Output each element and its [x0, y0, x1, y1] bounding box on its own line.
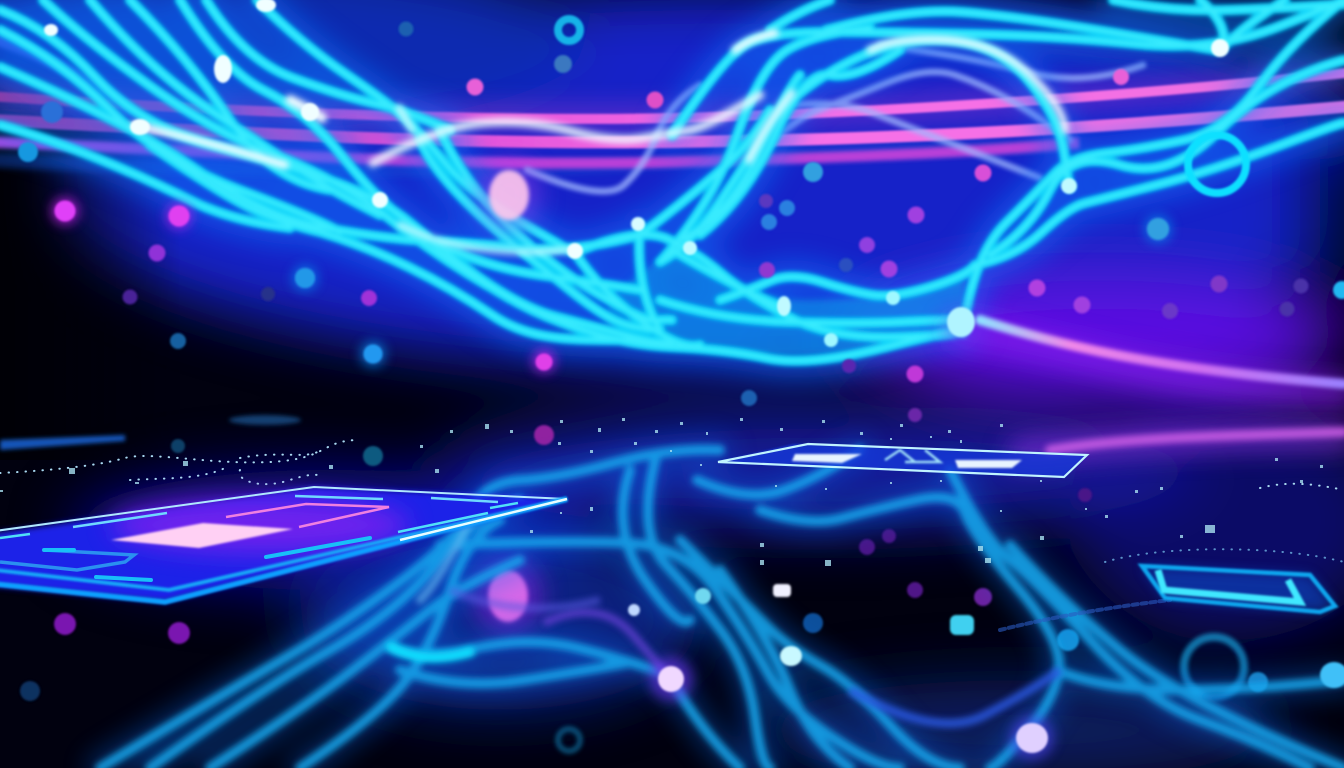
floating strands wave: [0, 0, 1344, 361]
distant blurred platforms: [0, 415, 301, 450]
white highlights on strands: [135, 33, 1065, 252]
icon: ring upper right: [1188, 135, 1246, 193]
icon: ring lower center: [558, 729, 580, 751]
far lavender strands: [0, 40, 1143, 191]
circuit panel left: [0, 487, 567, 602]
circuit panel center: [718, 444, 1087, 477]
glowing pink chip: [111, 523, 293, 548]
pink horizontal light bands: [0, 72, 1344, 171]
icon: ring lower right: [1184, 637, 1244, 697]
bright floor nodes: [628, 584, 1344, 760]
pink-purple reflection stream: [1020, 432, 1344, 452]
floor lights scatter: [0, 418, 1323, 566]
large rings: [558, 19, 1246, 751]
dotted floor circuits: [0, 440, 1344, 630]
panel outline: [0, 487, 567, 531]
reflected strands on the floor: [100, 450, 1344, 768]
icon: ring top: [558, 19, 580, 41]
circuit panel right: [1142, 566, 1335, 612]
pink-purple tail stream: [960, 320, 1344, 392]
bright nodes on strands: [44, 0, 1229, 347]
blurred pink orbs: [474, 161, 542, 634]
